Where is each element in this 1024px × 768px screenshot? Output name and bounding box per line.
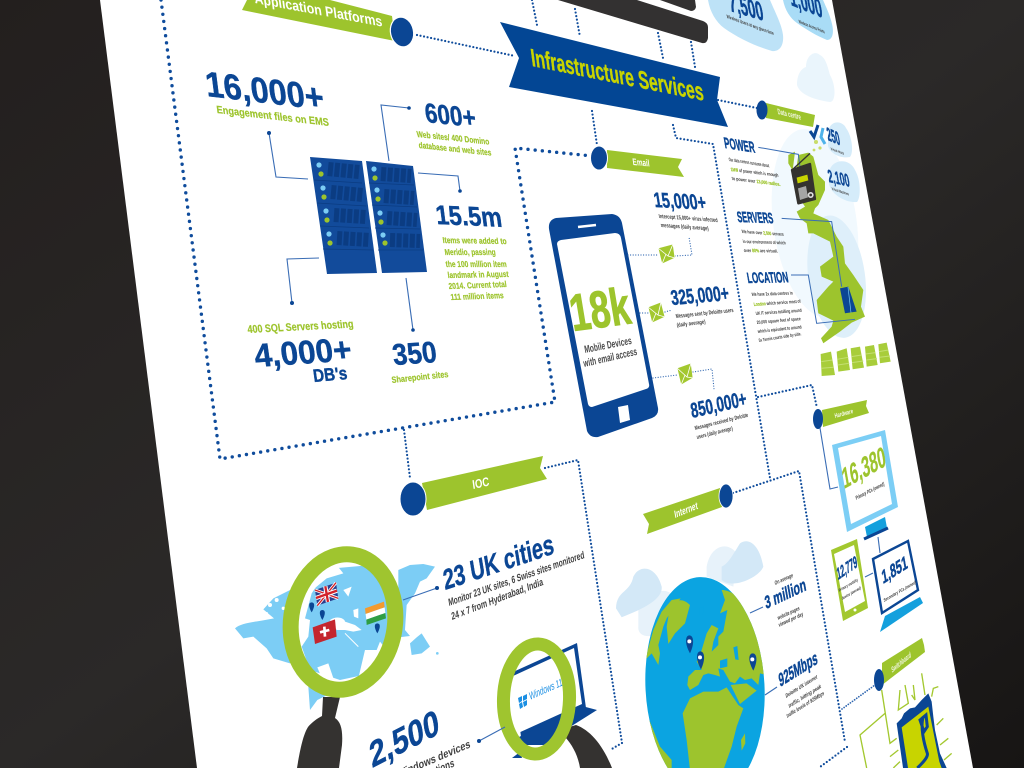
stat: 15.5m: 15.5m	[434, 199, 504, 233]
banner: infrastructure services: Infrastructure Services	[529, 45, 705, 107]
magnifier: windows laptop	[502, 643, 612, 768]
data storage row	[821, 343, 891, 376]
stat: 350	[390, 336, 449, 385]
panel border: application platforms	[161, 0, 592, 459]
stat: 3 million: website pages	[777, 606, 800, 622]
stat: 925Mbps: 925Mbps	[777, 647, 819, 691]
application platforms panel	[161, 0, 592, 459]
stat: 925Mbps: traffic levels of 925Mbps	[786, 691, 825, 720]
stat: 325,000+: (daily average)	[676, 320, 706, 329]
banner: infrastructure services	[500, 22, 728, 127]
banner: hardware: Hardware	[834, 408, 854, 420]
banner: application platforms	[242, 0, 416, 49]
windows logo	[518, 694, 527, 709]
connector into switchboard	[842, 685, 875, 709]
stat: 325,000+	[669, 282, 734, 329]
cloud: 1,000 access points	[783, 0, 833, 40]
internet panel	[616, 471, 847, 768]
stat: 4,000+ DB's: 400 SQL Servers hosting	[247, 319, 354, 336]
tablet: 12,779	[831, 539, 868, 621]
cloud: 7,500 wireless users	[708, 0, 783, 51]
connector lines from servers	[267, 105, 462, 332]
virtual hosts clouds	[810, 122, 860, 202]
handle	[566, 725, 612, 768]
icon: envelopes	[648, 244, 693, 385]
lens ring	[282, 547, 404, 697]
laptop: 1,851	[873, 541, 923, 632]
power text: POWER	[723, 135, 756, 157]
top dotted connectors	[532, 0, 695, 67]
stat: 325,000+: Messages sent by Deloitte users	[675, 308, 734, 320]
email connectors	[628, 237, 714, 389]
connector: 2,500	[479, 727, 505, 741]
location text: LOCATION	[746, 269, 790, 287]
cloud: 250 virtual hosts: 250	[825, 123, 842, 150]
magnifier handle	[297, 697, 342, 768]
cloud: 7,500 wireless users: Wireless Users at any given time	[726, 14, 775, 37]
connector into hardware	[758, 385, 817, 408]
stat: 325,000+: 325,000+	[669, 282, 731, 310]
stat: 3 million: 3 million	[763, 574, 807, 613]
stat: 23 UK cities	[441, 527, 585, 623]
tablet: 12,779: Primary mobility	[838, 577, 859, 593]
phone: 18k mobile devices: 18k	[565, 278, 635, 343]
IOC panel	[235, 430, 622, 768]
laptop	[512, 643, 597, 758]
stat: 15.5m: the 100 million item	[445, 259, 508, 269]
stat: 4,000+ DB's: 4,000+	[252, 331, 354, 375]
power text: 1MW of power which is enough	[730, 167, 779, 179]
data centre panel	[673, 100, 891, 478]
phone: 18k mobile devices: with email access	[582, 346, 638, 370]
connector into IOC	[404, 430, 410, 478]
connectors	[718, 100, 757, 108]
world map	[235, 564, 439, 710]
stat: 350: 350	[390, 336, 439, 372]
tablet: 12,779: device (owned)	[841, 585, 862, 601]
connector lines on map	[758, 147, 855, 323]
laptop: 1,851: 1,851	[880, 551, 909, 588]
stat: 850,000+: 850,000+	[689, 387, 748, 423]
stat: 23 UK cities: 24 x 7 from Hyderabad, India	[451, 577, 544, 623]
stat: 23 UK cities: 23 UK cities	[441, 527, 556, 596]
location text: London which service most of	[753, 299, 802, 308]
stat: 850,000+	[689, 387, 749, 441]
panel border	[733, 471, 845, 742]
stat: 850,000+: users (daily average)	[696, 426, 733, 441]
stat: 925Mbps	[777, 647, 825, 720]
power text	[723, 135, 781, 188]
panel border	[545, 460, 622, 750]
connector to infrastructure banner	[417, 35, 515, 56]
flag: UK	[315, 583, 338, 606]
icon: tick and bolt	[810, 125, 825, 151]
monitor: 16,380: Primary PCs (owned)	[855, 481, 885, 502]
servers text: over 80% are virtual.	[743, 248, 779, 255]
faint cloud	[797, 53, 834, 102]
stat: 3 million: viewed per day	[778, 611, 804, 629]
stat: 16,000+: Engagement files on EMS	[216, 104, 330, 129]
map pins	[309, 602, 380, 633]
servers text: SERVERS	[736, 209, 775, 227]
stat: 350: Sharepoint sites	[391, 369, 449, 385]
connector into email	[592, 111, 597, 145]
cloud: 2,100 virtual machines: 2,100	[826, 166, 851, 191]
stat: 16,000+: 16,000+	[203, 64, 326, 118]
servers text: in our environment of which	[742, 239, 786, 246]
monitor: 16,380: 16,380	[840, 440, 888, 495]
phone: 18k mobile devices	[549, 214, 658, 437]
servers text: We have over 2,500 servers	[741, 229, 784, 238]
servers text	[736, 209, 786, 255]
laptop: 1,851: Secondary PCs (owned)	[883, 579, 917, 603]
cloud: 250 virtual hosts: Virtual Hosts	[830, 147, 844, 156]
stat: 15,000+: Intercept 15,000+ virus infected	[658, 214, 718, 224]
UK map with halo	[758, 123, 891, 376]
phone: 18k mobile devices: Mobile Devices	[583, 335, 633, 356]
stat: 15.5m: 111 million items	[450, 290, 504, 302]
location text: 5x Tennis courts side by side.	[758, 331, 802, 344]
magnifier: world map with flags	[282, 547, 407, 768]
location text	[746, 269, 802, 344]
cloud: 1,000 access points: Wireless Access Points	[798, 19, 825, 35]
banner: hardware	[813, 400, 869, 429]
tablet: 12,779: 12,779	[836, 553, 859, 584]
stat: 925Mbps: traffic, hitting peak	[788, 683, 822, 710]
banner: switchboard: Switchboard	[891, 649, 912, 675]
connector lines	[820, 428, 880, 577]
stat: 600+: Web sites/ 400 Domino	[416, 129, 490, 147]
hardware panel	[758, 385, 923, 632]
lens ring	[502, 643, 571, 755]
globe pins	[686, 635, 756, 671]
windows text: Windows 11	[528, 676, 563, 703]
top dark bars	[558, 0, 708, 43]
clouds	[616, 541, 763, 636]
location text: 20,000 square feet of space	[756, 316, 801, 326]
stat: 4,000+ DB's: DB's	[312, 363, 348, 386]
banner: IOC	[400, 456, 547, 516]
stat: 15.5m: landmark in August	[447, 269, 509, 280]
icon: chip with phone	[860, 673, 952, 768]
connectors	[750, 607, 777, 695]
stat: 4,000+ DB's	[247, 319, 354, 386]
location text: UK IT services totalling around	[755, 308, 802, 317]
banner: internet	[643, 484, 733, 534]
stat: 15.5m: Meridio, passing	[444, 247, 496, 257]
banner: internet: Internet	[674, 501, 699, 521]
lens	[302, 566, 388, 680]
power text: to power over 13,000 radios.	[731, 176, 781, 188]
radio icon	[792, 153, 815, 203]
flag: Switzerland	[313, 619, 337, 644]
location text: which is equivalent to around	[757, 324, 802, 335]
stat: 925Mbps: Deloitte UK internet	[785, 674, 818, 700]
stat: 850,000+: Messages received by Deloitte	[694, 413, 749, 432]
stat: 15.5m: 2014. Current total	[448, 279, 507, 291]
cloud: 2,100 virtual machines: Virtual Machines	[831, 187, 849, 197]
stat: 15,000+: 15,000+	[652, 189, 708, 215]
switchboard panel	[842, 638, 952, 768]
flag: India	[365, 602, 386, 625]
connector: 23 UK cities	[403, 588, 437, 600]
stat: 600+: 600+	[423, 97, 477, 133]
stat: 3 million: On average	[774, 573, 794, 587]
banner: data centre: Data centre	[777, 107, 802, 122]
stat: 600+	[416, 97, 492, 158]
banner: email: Email	[632, 157, 650, 169]
banner: IOC: IOC	[471, 475, 490, 492]
banner: email	[590, 146, 684, 177]
stat: 3 million	[763, 573, 807, 629]
stat: 15,000+	[652, 189, 718, 232]
stat: 15,000+: messages (daily average)	[660, 223, 709, 232]
stat: 15.5m	[434, 199, 509, 302]
monitor: 16,380	[832, 430, 898, 539]
banner: data centre	[756, 100, 815, 127]
globe	[640, 574, 770, 768]
location text: We have 2x data centres in	[751, 291, 793, 298]
top wireless clouds	[708, 0, 834, 102]
cloud: 2,100 virtual machines	[826, 161, 860, 202]
stat: 23 UK cities: Monitor 23 UK sites, 6 Swiss sites monitored	[448, 550, 585, 609]
icon: server racks	[310, 157, 427, 274]
stat: 600+: database and web sites	[418, 140, 492, 158]
email panel	[549, 111, 749, 441]
stat: 15.5m: Items were added to	[442, 235, 507, 246]
power text: Our data centres consume about	[728, 157, 770, 169]
